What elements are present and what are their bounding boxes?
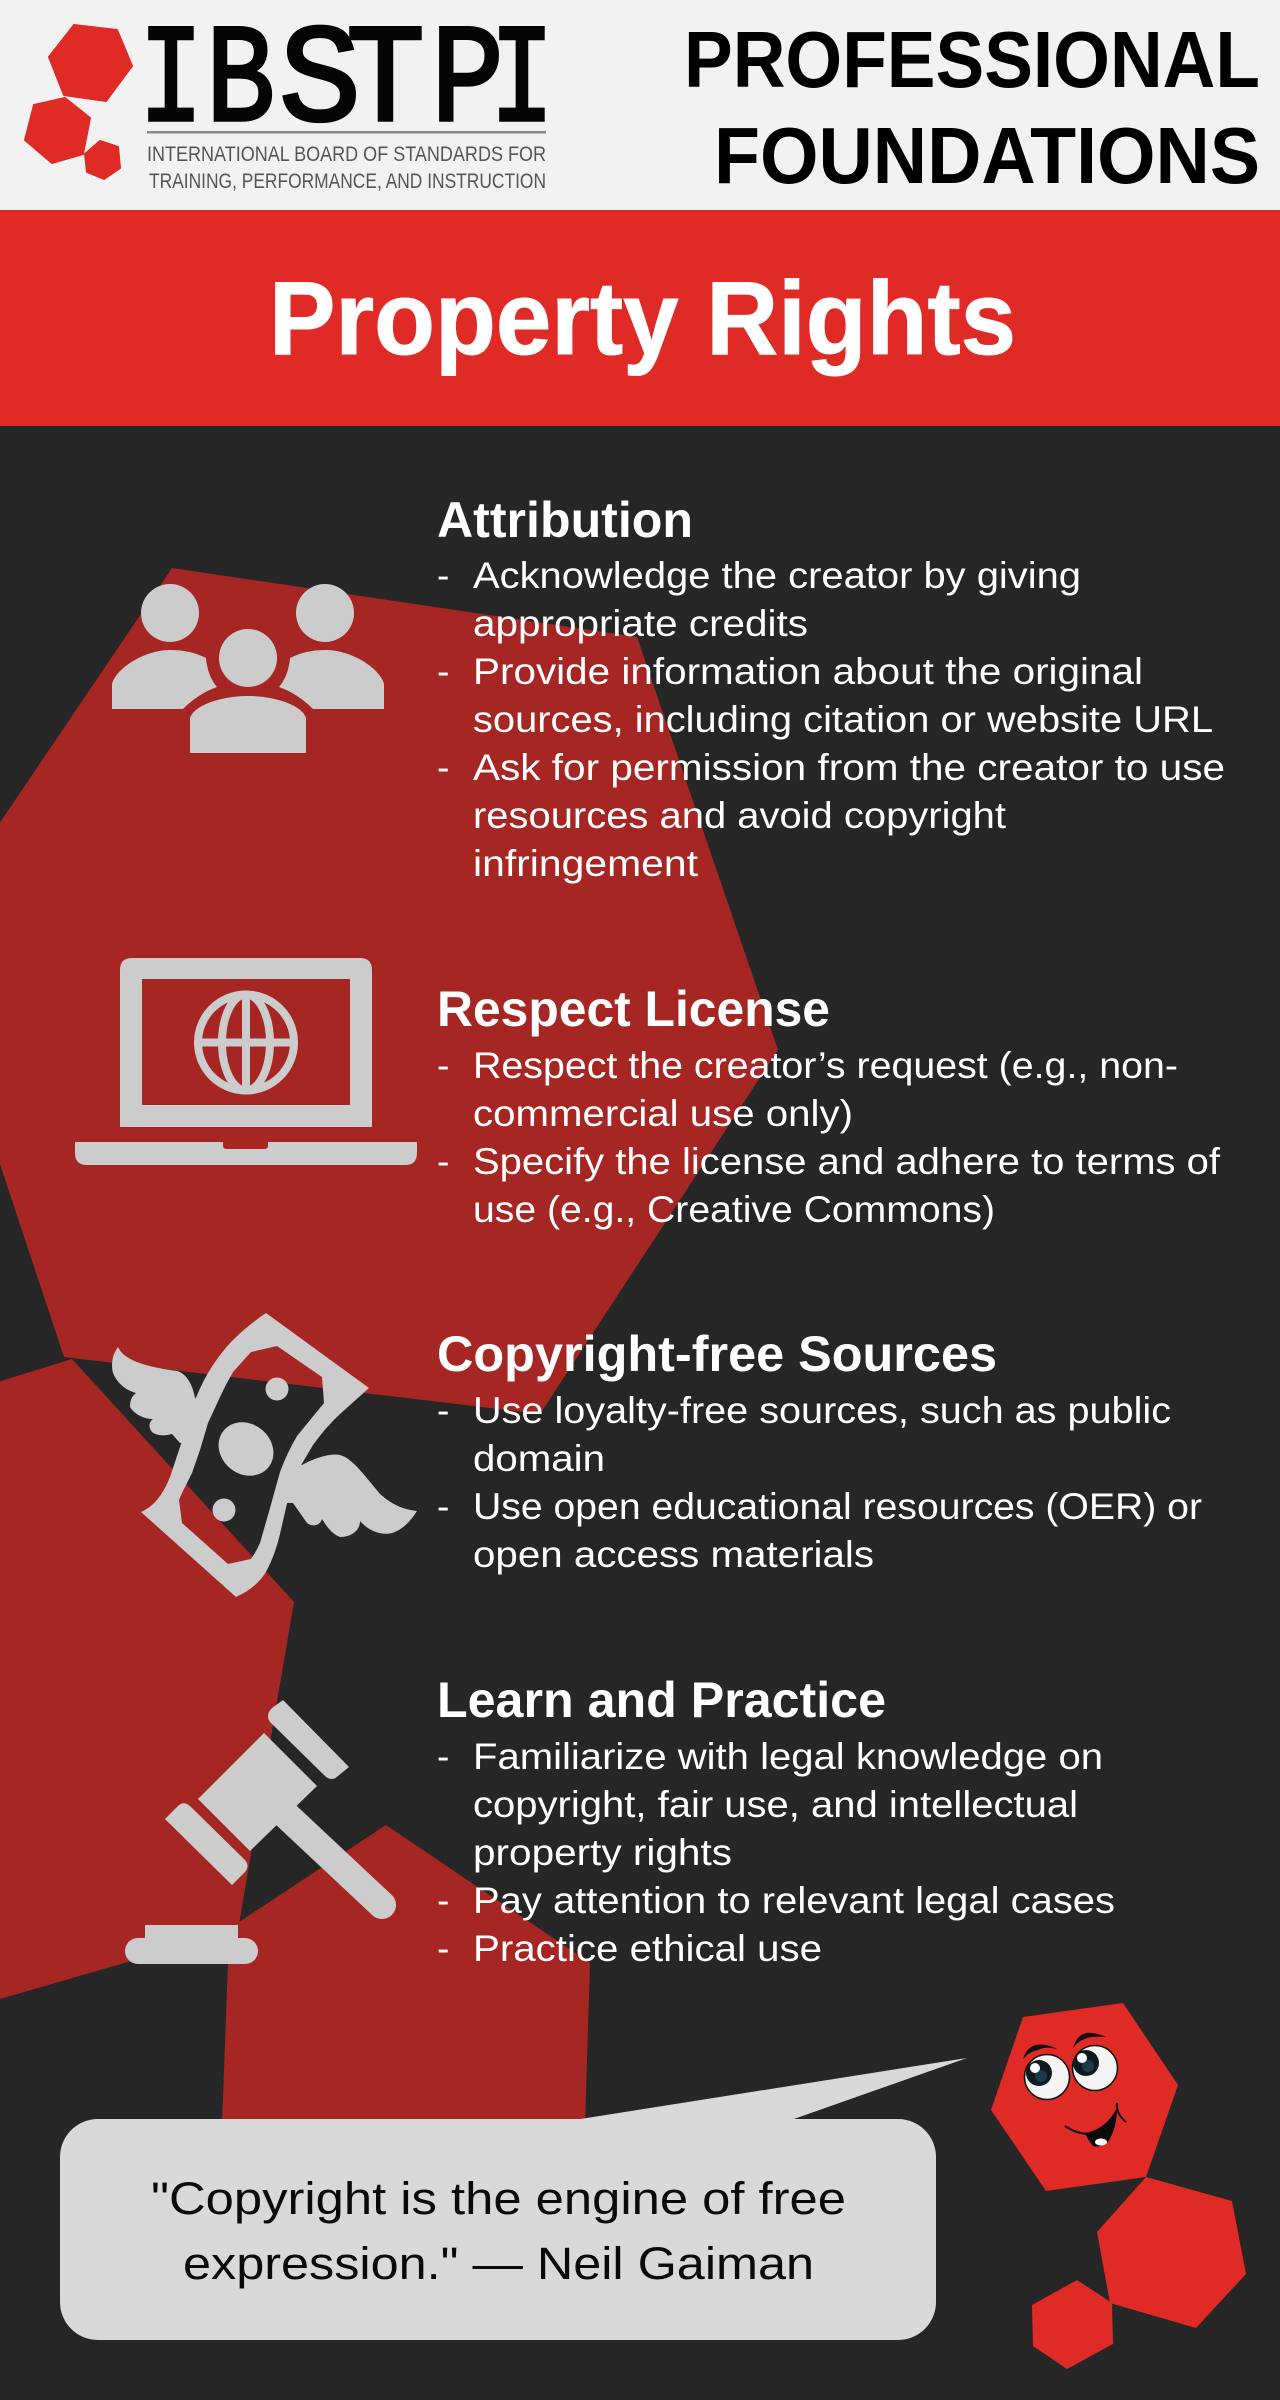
logo: IBSTPI: T — [346, 4, 425, 163]
section: Attribution: - — [437, 651, 449, 692]
section: Copyright-free Sources: Copyright-free Sources — [437, 1326, 997, 1382]
section: Attribution: infringement — [473, 843, 699, 884]
section: Copyright-free Sources: - — [437, 1486, 449, 1527]
section: Attribution: - — [437, 747, 449, 788]
mascot: red hexagons with face — [991, 2003, 1246, 2369]
section: Respect License: Specify the license and adhere to terms of — [473, 1141, 1221, 1182]
logo: IBSTPI: I — [490, 4, 554, 163]
section: Learn and Practice: property rights — [473, 1832, 732, 1873]
section: Learn and Practice: Familiarize with legal knowledge on — [473, 1736, 1103, 1777]
logo: IBSTPI: INTERNATIONAL BOARD OF STANDARDS FOR — [147, 143, 546, 166]
section: Attribution: sources, including citation or website URL — [473, 699, 1213, 740]
section: Learn and Practice: Practice ethical use — [473, 1928, 822, 1969]
logo: IBSTPI: B — [206, 4, 275, 163]
section: Copyright-free Sources — [437, 1326, 1202, 1575]
callout: quote bubble: expression." — Neil Gaiman — [183, 2238, 814, 2289]
section: Copyright-free Sources: open access materials — [473, 1534, 874, 1575]
section: Copyright-free Sources: - — [437, 1390, 449, 1431]
section: Learn and Practice: - — [437, 1736, 449, 1777]
logo: IBSTPI — [25, 4, 554, 193]
title banner — [0, 210, 1280, 426]
section: Attribution: Ask for permission from the creator to use — [473, 747, 1225, 788]
logo: IBSTPI: P — [431, 4, 504, 163]
section: Attribution: Provide information about the original — [473, 651, 1143, 692]
section: Attribution: resources and avoid copyright — [473, 795, 1007, 836]
title banner: Property Rights — [269, 261, 1016, 377]
section: Learn and Practice: - — [437, 1880, 449, 1921]
section: Respect License — [437, 981, 1221, 1230]
section: Attribution: Acknowledge the creator by giving — [473, 555, 1081, 596]
mascot mouth — [1065, 2103, 1126, 2146]
logo: IBSTPI: I — [139, 4, 203, 163]
section: Attribution: appropriate credits — [473, 603, 808, 644]
section: Respect License: commercial use only) — [473, 1093, 853, 1134]
section: Respect License: Respect the creator’s request (e.g., non- — [473, 1045, 1178, 1086]
icon: people — [112, 584, 384, 753]
section: Respect License: Respect License — [437, 981, 830, 1037]
section: Learn and Practice: copyright, fair use, and intellectual — [473, 1784, 1078, 1825]
background dark red hexagons — [0, 568, 778, 2125]
icon: gavel — [125, 1700, 382, 1964]
section: Respect License: - — [437, 1045, 449, 1086]
section: Attribution: Attribution — [437, 492, 693, 548]
section: Respect License: use (e.g., Creative Commons) — [473, 1189, 995, 1230]
mascot eyes — [1023, 2033, 1118, 2100]
header title: FOUNDATIONS — [714, 111, 1260, 200]
section: Copyright-free Sources: domain — [473, 1438, 605, 1479]
callout: quote bubble — [60, 2058, 967, 2340]
section: Copyright-free Sources: Use open educational resources (OER) or — [473, 1486, 1202, 1527]
section: Learn and Practice: Learn and Practice — [437, 1672, 886, 1728]
section: Attribution: - — [437, 555, 449, 596]
logo: IBSTPI: S — [279, 4, 361, 163]
section: Respect License: - — [437, 1141, 449, 1182]
header band — [0, 0, 1280, 210]
header title — [684, 15, 1260, 200]
callout: quote bubble: "Copyright is the engine of free — [151, 2173, 846, 2224]
section: Learn and Practice: - — [437, 1928, 449, 1969]
icon: laptop with globe — [75, 958, 417, 1165]
section: Learn and Practice: Pay attention to relevant legal cases — [473, 1880, 1115, 1921]
logo: IBSTPI: TRAINING, PERFORMANCE, AND INSTRUCTION — [149, 170, 546, 193]
section: Copyright-free Sources: Use loyalty-free sources, such as public — [473, 1390, 1171, 1431]
section: Attribution — [437, 492, 1225, 884]
icon: flying money — [112, 1313, 417, 1597]
section: Learn and Practice — [437, 1672, 1115, 1969]
